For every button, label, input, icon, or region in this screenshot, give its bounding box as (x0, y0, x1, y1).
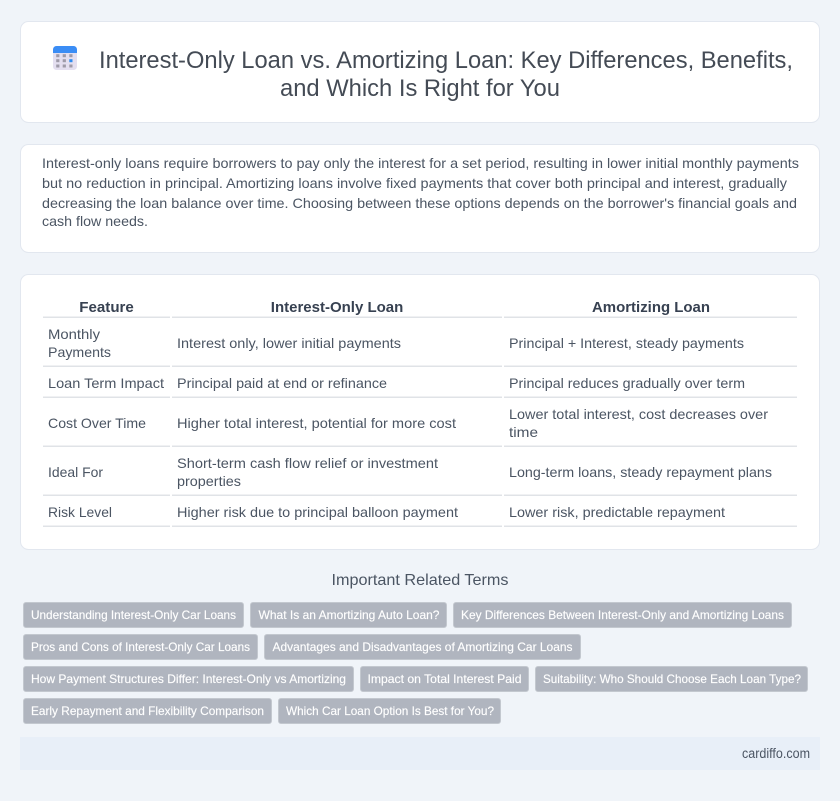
footer (20, 737, 820, 770)
table row: cost over time: Lower total interest, cost decreases over (509, 406, 768, 422)
table row: cost over time: Cost Over Time (48, 415, 146, 431)
tag: What Is an Amortizing Auto Loan? (258, 608, 440, 622)
table row: loan term impact (48, 375, 745, 391)
tag: Understanding Interest-Only Car Loans (31, 608, 236, 622)
table grid lines (43, 317, 797, 526)
table header: Feature (79, 299, 134, 316)
tag: Advantages and Disadvantages of Amortizing Car Loans (272, 640, 572, 654)
text block: introduction: cash flow needs. (42, 213, 148, 229)
table header: Amortizing Loan (592, 299, 710, 316)
tag (24, 602, 244, 628)
tag (264, 634, 580, 660)
table row: risk level (48, 504, 725, 520)
tag: Early Repayment and Flexibility Comparison (31, 704, 264, 718)
tag (250, 602, 446, 628)
text block: introduction: decreasing the loan balance over time. Choosing between these options depends on the borrower's financial goals and (42, 195, 797, 211)
table header (79, 299, 710, 316)
tag (536, 666, 808, 692)
table row: ideal for: properties (177, 473, 241, 489)
tag (24, 634, 258, 660)
table row: ideal for: Ideal For (48, 464, 103, 480)
table row: monthly payments (48, 326, 744, 360)
text block: introduction: but no reduction in principal. Amortizing loans involve fixed payments that cover both principal and interest, gradually (42, 175, 787, 191)
icon: calendar (53, 46, 77, 70)
tag: Key Differences Between Interest-Only and Amortizing Loans (461, 608, 784, 622)
table row: monthly payments: Monthly (48, 326, 100, 342)
table row: risk level: Risk Level (48, 504, 112, 520)
title: Interest-Only Loan vs. Amortizing Loan: Key Differences, Benefits, (99, 47, 793, 74)
title (99, 47, 793, 102)
table row: ideal for: Short-term cash flow relief or investment (177, 455, 438, 471)
tag: How Payment Structures Differ: Interest-Only vs Amortizing (31, 672, 346, 686)
tag (454, 602, 792, 628)
table row: ideal for: Long-term loans, steady repayment plans (509, 464, 772, 480)
tag: Impact on Total Interest Paid (368, 672, 522, 686)
tag (360, 666, 528, 692)
text block: introduction: Interest-only loans require borrowers to pay only the interest for a set period, resulting in lower initial monthly payments (42, 155, 799, 171)
table row: ideal for (48, 455, 772, 489)
panel: introduction (20, 144, 820, 252)
footer: cardiffo.com (742, 746, 810, 761)
table row: cost over time: Higher total interest, potential for more cost (177, 415, 456, 431)
table row: loan term impact: Loan Term Impact (48, 375, 164, 391)
table row: cost over time (48, 406, 768, 440)
table row: monthly payments: Payments (48, 344, 111, 360)
table row: monthly payments: Principal + Interest, steady payments (509, 335, 744, 351)
table row: risk level: Higher risk due to principal balloon payment (177, 504, 458, 520)
tag (24, 698, 272, 724)
tag list: related terms (24, 602, 808, 724)
table row: cost over time: time (509, 424, 538, 440)
tag: Suitability: Who Should Choose Each Loan Type? (543, 672, 801, 686)
panel: header (20, 22, 820, 122)
tag: Pros and Cons of Interest-Only Car Loans (31, 640, 250, 654)
title: and Which Is Right for You (280, 75, 560, 102)
heading: important related terms: Important Related Terms (332, 572, 508, 589)
table row: loan term impact: Principal reduces gradually over term (509, 375, 745, 391)
tag: Which Car Loan Option Is Best for You? (286, 704, 494, 718)
tag (278, 698, 500, 724)
tag (24, 666, 354, 692)
table row: loan term impact: Principal paid at end or refinance (177, 375, 387, 391)
table header: Interest-Only Loan (271, 299, 403, 316)
text block: introduction (42, 155, 799, 229)
table row: monthly payments: Interest only, lower initial payments (177, 335, 401, 351)
panel: comparison table (20, 274, 820, 550)
table row: risk level: Lower risk, predictable repayment (509, 504, 725, 520)
